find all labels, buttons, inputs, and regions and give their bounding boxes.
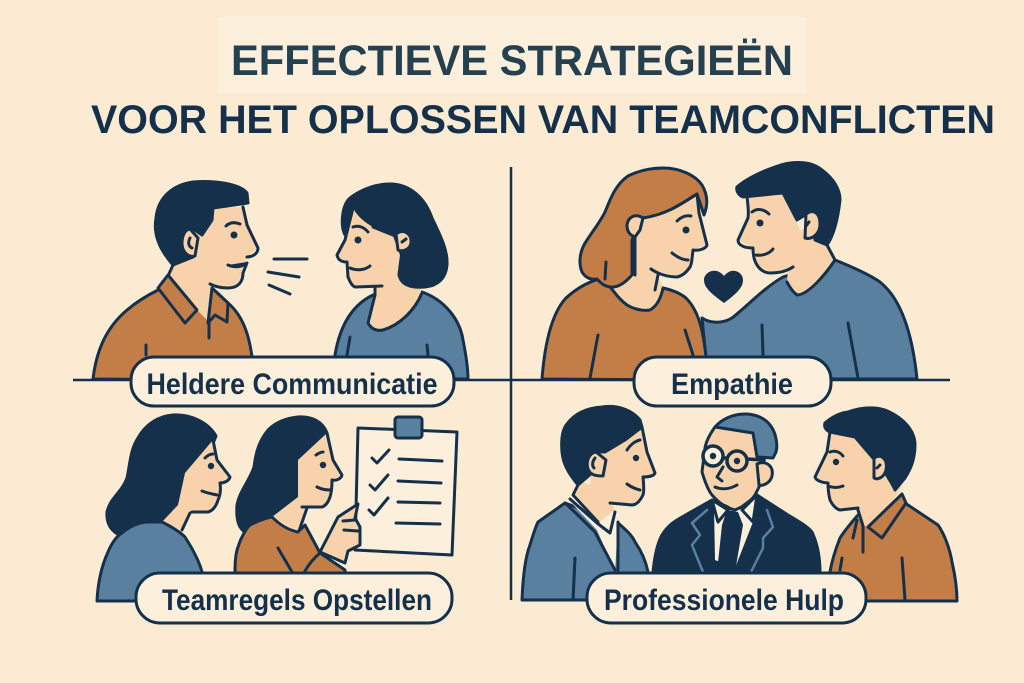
man left bbox=[522, 406, 655, 600]
panel: heldere communicatie bbox=[93, 181, 468, 380]
icon: heart bbox=[704, 271, 743, 303]
man right bbox=[815, 408, 957, 601]
label: teamregels opstellen bbox=[136, 573, 452, 623]
label: professionele hulp: Professionele Hulp bbox=[604, 584, 844, 617]
title: EFFECTIEVE STRATEGIEËN bbox=[231, 37, 793, 85]
label: empathie bbox=[634, 357, 831, 406]
label: professionele hulp bbox=[587, 573, 866, 623]
label: empathie: Empathie bbox=[671, 368, 793, 401]
panel: teamregels opstellen bbox=[97, 415, 457, 601]
label: heldere communicatie bbox=[131, 357, 454, 406]
label: teamregels opstellen: Teamregels Opstellen bbox=[162, 584, 432, 617]
man bbox=[702, 162, 917, 379]
woman right bbox=[235, 417, 345, 580]
older man with glasses bbox=[653, 414, 820, 572]
label: heldere communicatie: Heldere Communicatie bbox=[146, 368, 438, 401]
icon: speech lines bbox=[268, 259, 307, 294]
panel: professionele hulp bbox=[522, 406, 957, 601]
woman left bbox=[97, 415, 345, 601]
woman bbox=[542, 168, 708, 380]
pointing hand bbox=[320, 504, 360, 563]
man speaking bbox=[93, 181, 258, 380]
title bbox=[91, 17, 995, 142]
title: VOOR HET OPLOSSEN VAN TEAMCONFLICTEN bbox=[91, 98, 995, 142]
icon: clipboard checklist bbox=[320, 417, 457, 563]
panel: empathie bbox=[542, 162, 917, 380]
woman listening bbox=[335, 184, 468, 379]
dividers bbox=[73, 167, 950, 600]
